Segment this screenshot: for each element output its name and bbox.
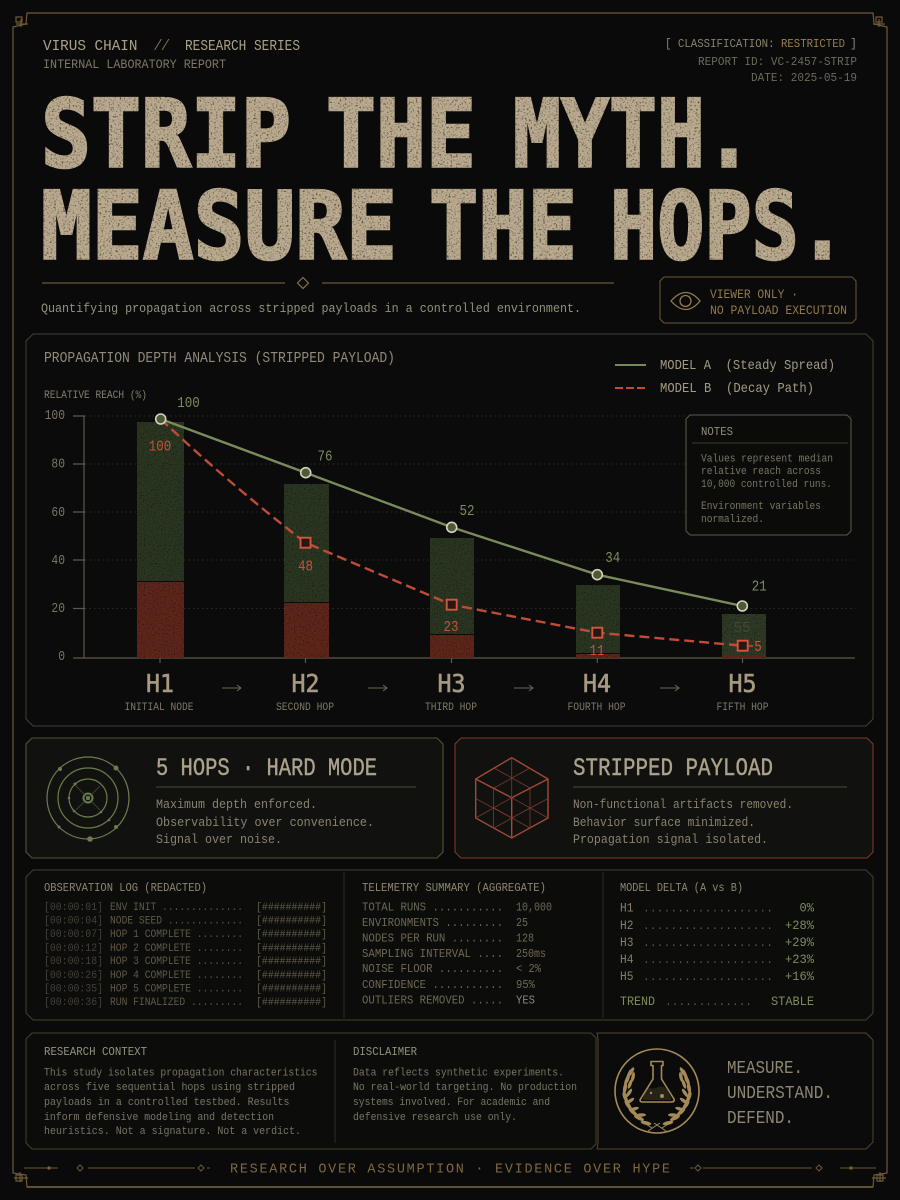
values: model A [177,396,767,596]
title divider [42,278,614,288]
observation log: HOP 5 COMPLETE ........ [110,984,243,996]
telemetry summary: CONFIDENCE ........... [362,979,503,992]
header right: classification block: [ CLASSIFICATION: [665,37,781,51]
model delta: H5 [620,969,634,984]
motto text [727,1058,833,1129]
model delta: +28% [785,918,814,933]
telemetry summary [362,881,552,1008]
disclaimer: systems involved. For academic and [353,1097,550,1109]
title: MEASURE [41,172,397,282]
research context: across five sequential hops using stripped [44,1082,295,1094]
research context: heuristics. Not a signature. Not a verdict. [44,1126,301,1138]
icon: flask emblem [615,1049,699,1133]
motto text: MEASURE. [727,1058,803,1079]
telemetry summary: ENVIRONMENTS ......... [362,917,503,930]
disclaimer: defensive research use only. [353,1112,517,1124]
card text: Observability over convenience. [156,815,374,830]
hop labels: FOURTH HOP [568,702,626,714]
stacked bars [137,422,766,658]
card text [156,797,374,847]
y axis title: RELATIVE REACH (%) [44,390,147,402]
header right: classification block: REPORT ID: VC-2457-STRIP [698,55,857,69]
model delta: STABLE [771,994,814,1009]
header left: series label: INTERNAL LABORATORY REPORT [43,57,226,72]
chart heading: PROPAGATION DEPTH ANALYSIS (STRIPPED PAYLOAD) [44,351,395,367]
title [41,80,846,282]
title: HOPS. [610,172,846,282]
telemetry summary: OUTLIERS REMOVED ..... [362,994,503,1008]
telemetry summary: < 2% [516,963,541,976]
values: model A: 100 [177,396,200,412]
values: model B [149,440,762,660]
panel: research context and disclaimer [26,1033,596,1149]
header left: series label [43,38,300,72]
research context: RESEARCH CONTEXT [44,1045,147,1059]
observation log: [00:00:18] [44,956,103,968]
research context: inform defensive modeling and detection [44,1112,274,1124]
title: THE [429,172,577,282]
model delta: +16% [785,969,814,984]
observation log: [00:00:36] [44,997,103,1009]
model delta: ................... [643,921,773,933]
observation log: [##########] [256,997,327,1009]
card text: Behavior surface minimized. [573,815,755,830]
values: model B: 100 [149,440,171,456]
model delta [620,881,814,1009]
telemetry summary: TELEMETRY SUMMARY (AGGREGATE) [362,881,546,895]
observation log: [##########] [256,916,327,928]
panel: motto [597,1033,873,1149]
telemetry summary: TOTAL RUNS ........... [362,902,503,915]
observation log: HOP 2 COMPLETE ........ [110,943,243,955]
footer tagline: RESEARCH OVER ASSUMPTION · EVIDENCE OVER HYPE [230,1163,670,1178]
card text: Signal over noise. [156,832,282,847]
motto text: DEFEND. [727,1108,794,1129]
y axis labels [45,409,65,665]
model delta: H4 [620,952,634,967]
telemetry summary: NOISE FLOOR .......... [362,963,503,976]
research context: payloads in a controlled testbed. Results [44,1097,290,1109]
card text: Propagation signal isolated. [573,832,768,847]
header right: classification block: DATE: 2025-05-19 [751,71,857,85]
panel: data tables [26,870,873,1020]
model delta: TREND [620,994,655,1009]
hop labels [124,669,768,714]
model delta: 0% [800,901,814,916]
icon: wireframe cube [476,758,548,838]
telemetry summary: 95% [516,979,535,992]
observation log: ENV INIT .............. [110,902,243,914]
hop labels: SECOND HOP [276,702,334,714]
notes box: NOTES [701,425,733,439]
header right: classification block [665,37,857,85]
hop labels: H5 [728,669,756,698]
observation log: HOP 4 COMPLETE ........ [110,970,243,982]
line: model A [161,419,742,606]
telemetry summary: 250ms [516,948,546,961]
observation log: [##########] [256,902,327,914]
notes box: normalized. [701,514,764,526]
disclaimer: Data reflects synthetic experiments. [353,1068,564,1080]
observation log: RUN FINALIZED ......... [110,997,243,1009]
markers: model B [300,538,748,651]
disclaimer: No real-world targeting. No production [353,1082,577,1094]
model delta: ................... [643,972,773,984]
header left: series label: VIRUS CHAIN [43,38,138,55]
observation log: [##########] [256,929,327,941]
panel: propagation chart [26,334,873,726]
y axis labels: 80 [51,458,65,472]
model delta: ................... [643,904,773,916]
observation log: [##########] [256,943,327,955]
observation log: [00:00:04] [44,916,103,928]
panel: stripped payload [455,738,873,858]
observation log: [00:00:12] [44,943,103,955]
telemetry summary: 25 [516,917,528,930]
observation log: [00:00:26] [44,970,103,982]
observation log: [00:00:07] [44,929,103,941]
hop labels: FIFTH HOP [716,702,768,714]
telemetry summary: NODES PER RUN ........ [362,933,503,946]
title: STRIP [41,80,291,190]
header left: series label: // [154,38,170,55]
observation log: [00:00:35] [44,984,103,996]
hop labels: H4 [583,669,611,698]
values: model A: 76 [318,450,332,466]
viewer only badge [660,277,856,323]
card heading: 5 HOPS · HARD MODE [156,754,377,783]
notes box: 10,000 controlled runs. [701,479,832,491]
hop labels: H2 [292,669,320,698]
icon: eye [671,292,700,310]
viewer only badge: VIEWER ONLY · [710,287,798,302]
notes box: relative reach across [701,466,821,478]
model delta: MODEL DELTA (A vs B) [620,881,743,895]
arrows between hops [222,685,679,691]
model delta: ................... [643,955,773,967]
markers: model A [156,414,747,611]
telemetry summary: 10,000 [516,902,552,915]
legend [615,358,835,397]
card text: Maximum depth enforced. [156,797,317,812]
y axis labels: 0 [58,650,65,665]
title: THE [326,80,476,190]
telemetry summary: SAMPLING INTERVAL .... [362,948,503,961]
values: model B: 23 [444,620,458,636]
observation log: [00:00:01] [44,902,103,914]
line: model B [160,419,743,646]
observation log: NODE SEED ............. [110,916,243,928]
header right: classification block: ] [850,37,857,51]
model delta: H2 [620,918,634,933]
notes box [686,415,851,535]
model delta: +29% [785,935,814,950]
observation log: HOP 1 COMPLETE ........ [110,929,243,941]
y axis labels: 20 [51,602,65,617]
footer ornaments [24,1165,876,1171]
model delta: ................... [643,938,773,950]
values: model B: 11 [590,644,604,660]
y axis labels: 60 [51,506,65,521]
observation log: [##########] [256,956,327,968]
y axis labels: 40 [51,554,65,569]
research context: This study isolates propagation characteristics [44,1068,318,1080]
notes box: Values represent median [701,454,833,466]
observation log: HOP 3 COMPLETE ........ [110,956,243,968]
values: model A: 34 [605,551,620,567]
hop labels: H1 [146,669,174,698]
observation log: [##########] [256,970,327,982]
model delta: H1 [620,901,634,916]
card heading: STRIPPED PAYLOAD [573,754,773,783]
telemetry summary: 128 [516,933,534,946]
legend: MODEL B (Decay Path) [660,381,814,397]
model delta: +23% [785,952,814,967]
faint bar value: 55 [733,621,751,637]
notes box: Environment variables [701,501,821,513]
header left: series label: RESEARCH SERIES [185,38,300,55]
telemetry summary: YES [516,994,535,1008]
header right: classification block: RESTRICTED [781,37,845,51]
research context [44,1045,318,1138]
motto text: UNDERSTAND. [727,1083,833,1104]
model delta: ............. [665,997,752,1009]
hop labels: THIRD HOP [425,702,477,714]
card text: Non-functional artifacts removed. [573,797,793,812]
observation log [44,881,327,1009]
title: MYTH. [513,80,753,190]
model delta: H3 [620,935,634,950]
hop labels: H3 [438,669,466,698]
values: model B: 5 [754,640,762,656]
values: model A: 52 [460,504,474,520]
grid lines and axes [73,416,855,663]
observation log: OBSERVATION LOG (REDACTED) [44,881,207,895]
icon: orbit rings [47,757,129,842]
values: model A: 21 [752,580,767,596]
card text [573,797,793,847]
viewer only badge: NO PAYLOAD EXECUTION [710,303,847,318]
observation log: [##########] [256,984,327,996]
legend: MODEL A (Steady Spread) [660,358,835,374]
subtitle: Quantifying propagation across stripped payloads in a controlled environment. [41,301,581,316]
values: model B: 48 [298,560,313,576]
y axis labels: 100 [45,409,65,424]
disclaimer [353,1045,577,1124]
hop labels: INITIAL NODE [124,702,194,714]
panel: five hops hard mode [26,738,443,858]
disclaimer: DISCLAIMER [353,1045,417,1059]
